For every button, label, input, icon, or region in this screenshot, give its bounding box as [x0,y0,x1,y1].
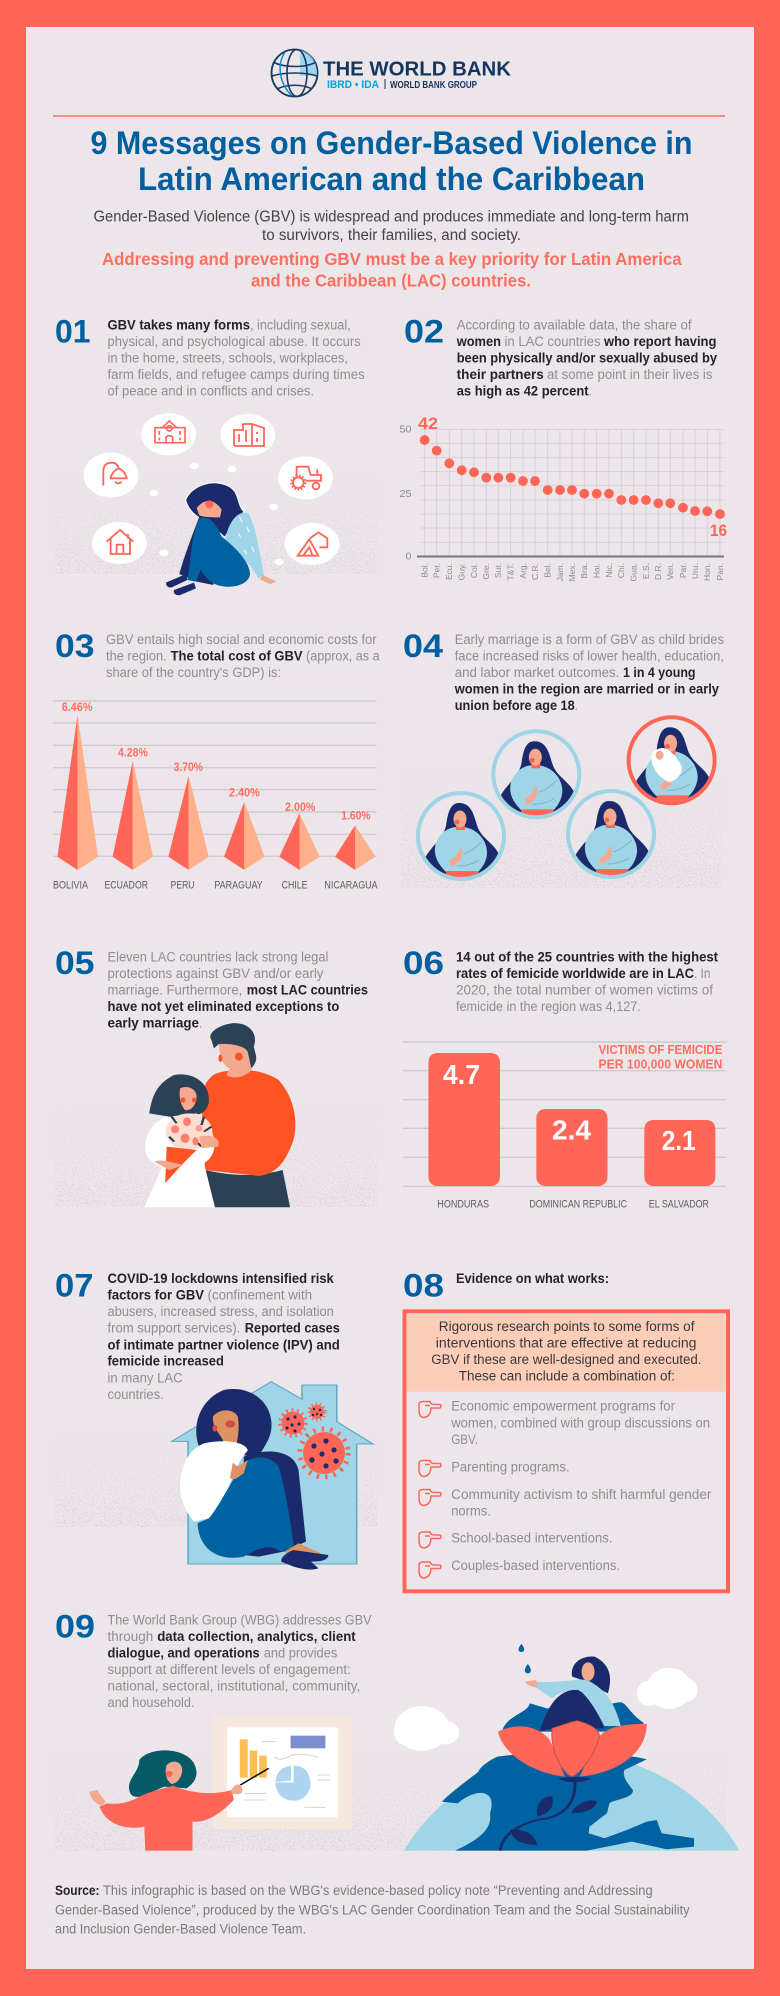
bar: Dominican Republic: DOMINICAN REPUBLIC [529,1198,627,1210]
message 05 text: have not yet eliminated exceptions to [108,999,339,1014]
logo: The World Bank: IBRD • IDA [327,79,379,91]
list item: community activism: norms. [451,1504,491,1519]
message 09 [55,1609,739,1851]
title: Latin American and the Caribbean [138,161,645,197]
message 07 text: COVID-19 lockdowns intensified risk [108,1271,334,1286]
dot chart: women reporting partner abuse by country: Mex. [567,563,577,581]
box header: Rigorous research points to some forms of [439,1319,695,1334]
message 07 text: of intimate partner violence (IPV) and [108,1337,340,1352]
message 09 text: and provides [264,1645,338,1660]
number 02: 02 [404,314,444,350]
chart caption: VICTIMS OF FEMICIDE [598,1042,723,1057]
message 04 text: face increased risks of lower health, education, [455,649,724,664]
dot chart: women reporting partner abuse by country: Par. [678,563,688,578]
bar: Bolivia: 6.46% [62,702,92,714]
message 08 heading: Evidence on what works: [456,1271,609,1286]
message 03 text: share of the country's GDP) is: [106,665,281,680]
message 03 text: GBV entails high social and economic costs for [106,632,377,647]
bar: Ecuador [104,747,153,892]
message 06 text: . In [694,966,710,981]
figure: sitting woman [166,483,277,595]
message 07 text: from support services). [108,1321,240,1336]
bar: Ecuador: ECUADOR [104,880,148,892]
intro text: Gender-Based Violence (GBV) is widespread and produces immediate and long-term harm [94,209,689,226]
spike chart: cost of GBV as share of GDP [53,701,378,892]
message 09 text: support at different levels of engagement: [108,1662,351,1677]
figure: woman [180,1389,328,1570]
bar: Bolivia: BOLIVIA [53,880,89,892]
dot chart: women reporting partner abuse by country: Ecu. [444,563,454,580]
list item: community activism [419,1487,712,1519]
list item: community activism: Community activism to shift harmful gender [451,1487,712,1502]
intro text [94,209,689,244]
medallion: young woman 3 [568,791,654,878]
message 01 [55,314,377,595]
message 09 text: The World Bank Group (WBG) addresses GBV [108,1612,372,1627]
number 04: 04 [403,628,443,664]
message 09 text: through [108,1629,153,1644]
dot chart: women reporting partner abuse by country: Col. [469,563,479,578]
source note: Source: [55,1883,100,1898]
message 09 text: national, sectoral, institutional, community, [108,1678,360,1693]
number 08: 08 [403,1268,444,1304]
message 02 text: who report having [603,334,716,349]
message 04 [400,628,724,888]
message 05 text: . [199,1015,202,1030]
figure: woman on flower [525,1656,621,1732]
message 01 text: in the home, streets, schools, workplaces, [108,350,348,365]
message 01 text: , including sexual, [250,317,351,332]
message 05 text: protections against GBV and/or early [108,966,324,981]
bar: Honduras: HONDURAS [437,1198,489,1210]
illustration: woman presenting data [55,1716,726,1851]
message 05 text: early marriage [108,1015,199,1030]
bar: El Salvador [644,1120,715,1210]
message 09 text: dialogue, and operations [108,1645,260,1660]
message 06 [403,945,726,1210]
illustration: young women in medallions [400,717,721,888]
dot chart: women reporting partner abuse by country: Sur. [493,563,503,578]
list item: economic empowerment: GBV. [451,1432,478,1447]
box header: interventions that are effective at reducing [436,1336,696,1351]
dot chart: women reporting partner abuse by country: Bel. [542,563,552,578]
bar: Paraguay: PARAGUAY [214,880,263,892]
message 05 text: Eleven LAC countries lack strong legal [108,949,328,964]
dot chart: women reporting partner abuse by country: 25 [400,488,412,500]
chart caption: PER 100,000 WOMEN [598,1057,722,1072]
water drops [519,1644,531,1673]
number 07: 07 [55,1268,94,1304]
message 07 text: femicide increased [108,1354,224,1369]
priority statement: and the Caribbean (LAC) countries. [251,271,531,291]
list item: economic empowerment: Economic empowerment programs for [451,1399,675,1414]
cloud left [394,1706,459,1751]
dot chart: women reporting partner abuse by country: Per. [432,563,442,578]
message 07 text: abusers, increased stress, and isolation [108,1304,334,1319]
bar: Honduras: 4.7 [443,1059,480,1090]
message 03 text: The total cost of GBV [171,649,302,664]
list item: parenting programs: Parenting programs. [451,1459,570,1474]
bar: El Salvador: 2.1 [662,1125,696,1156]
list item: couples-based interventions: Couples-based interventions. [451,1558,620,1573]
message 04 text: . [575,698,578,713]
globe [404,1752,739,1851]
logo: The World Bank [272,50,512,96]
icon: small virus [309,1404,325,1420]
message 02 text: in LAC countries [504,334,601,349]
illustration: child bride and adult man [55,1023,377,1207]
dot chart: women reporting partner abuse by country: Gre. [481,563,491,580]
bar: Dominican Republic: 2.4 [552,1114,591,1145]
bar: Peru: PERU [171,880,195,892]
bar: Dominican Republic [529,1109,627,1210]
source note [55,1883,690,1937]
message 05 text: most LAC countries [247,982,368,997]
message 04 text: women in the region are married or in early [454,682,719,697]
chart caption [598,1042,723,1072]
message 02 text: been physically and/or sexually abused by [457,350,717,365]
message 07 text: in many LAC [108,1370,183,1385]
cloud right [637,1668,697,1709]
bar: Nicaragua: 1.60% [341,811,371,823]
box header [407,1314,726,1392]
number 05: 05 [55,945,94,981]
dot chart: women reporting partner abuse by country: Pan. [715,563,725,580]
dot chart: women reporting partner abuse by country: Nic. [604,563,614,578]
list item: parenting programs [419,1459,570,1476]
box header: These can include a combination of: [459,1369,675,1384]
message 05 text: marriage. Furthermore, [108,982,242,997]
message 02 text: as high as 42 percent [457,383,589,398]
bar: Paraguay [214,787,265,892]
number 03: 03 [55,628,94,664]
medallion: young woman 1 [493,731,579,818]
message 02 text: According to available data, the share of [457,317,692,332]
number 06: 06 [403,945,444,981]
dot chart: women reporting partner abuse by country: 16 [710,521,727,540]
evidence box [404,1311,728,1591]
message 06 text: 2020, the total number of women victims of [456,982,713,997]
source note: Gender-Based Violence”, produced by the WBG's LAC Gender Coordination Team and the Social Sustainability [55,1902,690,1917]
message 06 text [456,949,718,1014]
message 09 text: and household. [108,1695,194,1710]
presentation board [212,1716,352,1829]
message 02 text: their partners [457,367,544,382]
dot chart: women reporting partner abuse by country: Jam. [555,563,565,581]
flower petals [498,1721,647,1777]
message 01 text [108,317,365,398]
message 01 text: physical, and psychological abuse. It occurs [108,334,361,349]
bar: Nicaragua [324,811,378,892]
message 02 [400,314,727,581]
dot chart: women reporting partner abuse by country: Hai. [592,563,602,578]
logo: The World Bank: THE WORLD BANK [323,58,512,80]
figure: girl with bouquet [144,1074,219,1207]
message 04 text: Early marriage is a form of GBV as child brides [455,632,724,647]
message 08 [403,1268,728,1591]
message 07 text: factors for GBV [108,1288,204,1303]
message 02 text [456,317,717,398]
number 01: 01 [55,314,90,350]
icon: office buildings [234,424,264,446]
dot chart: women reporting partner abuse by country: Arg. [518,563,528,579]
message 06 text: rates of femicide worldwide are in LAC [456,966,694,981]
bar: Paraguay: 2.40% [229,787,260,799]
bar: Chile: CHILE [282,880,308,892]
message 03 text: the region. [106,649,167,664]
source note: and Inclusion Gender-Based Violence Team. [55,1922,306,1937]
message 07 text: Reported cases [245,1321,340,1336]
priority statement [102,249,682,291]
message 01 text: GBV takes many forms [108,317,250,332]
title: 9 Messages on Gender-Based Violence in [90,125,692,161]
title [90,125,692,197]
dot chart: women reporting partner abuse by country: Uru. [690,563,700,579]
message 07 text: countries. [108,1387,164,1402]
icon: street lamp [103,463,127,486]
message 07 text: (confinement with [208,1288,312,1303]
list item: economic empowerment [419,1399,710,1447]
message 06 text: 14 out of the 25 countries with the highest [456,949,718,964]
bar: Nicaragua: NICARAGUA [324,880,378,892]
dot chart: women reporting partner abuse by country: Guy. [456,563,466,580]
message 04 text: 1 in 4 young [623,665,696,680]
message 02 text: at some point in their lives is [547,367,713,382]
bar: Honduras [428,1053,500,1210]
dot chart: women reporting partner abuse by country: T&T. [506,563,516,580]
bar: Bolivia [53,702,98,892]
bar: Peru [168,762,209,892]
icon: house [172,1382,373,1564]
dot chart: women reporting partner abuse by country: 42 [418,414,438,433]
icon: home [107,530,133,554]
bar: El Salvador: EL SALVADOR [649,1198,709,1210]
message 04 text: and labor market outcomes. [455,665,619,680]
message 05 [55,945,377,1207]
message 04 text [454,632,724,713]
message 07 [55,1268,377,1570]
bar: Peru: 3.70% [174,762,203,774]
message 02 text: women [456,334,501,349]
medallion: young mother with baby [629,717,715,804]
message 09 text [108,1612,372,1710]
bar: Chile: 2.00% [285,802,315,814]
message 01 text: farm fields, and refugee camps during times [108,367,365,382]
dot chart: women reporting partner abuse by country: Bol. [420,563,430,578]
logo: The World Bank: WORLD BANK GROUP [390,80,477,91]
message 03 text: (approx, as a [306,649,380,664]
figure: presenter [90,1750,242,1851]
icon: tractor [291,467,321,490]
message 04 text: union before age 18 [455,698,575,713]
message 09 text: data collection, analytics, client [157,1629,356,1644]
list item: couples-based interventions [419,1558,620,1578]
bar: Ecuador: 4.28% [118,747,148,759]
message 03 text [106,632,380,680]
list item: school-based interventions: School-based interventions. [451,1531,612,1546]
message 02 text: . [589,383,592,398]
flower and stem [500,1702,644,1851]
illustration: woman surrounded by places [55,413,377,595]
message 06 text: femicide in the region was 4,127. [456,999,641,1014]
dot chart: women reporting partner abuse by country: Hon. [702,563,712,581]
bar chart: victims of femicide per 100,000 women [403,1042,726,1210]
dot chart: women reporting partner abuse by country: 50 [400,424,412,436]
intro text: to survivors, their families, and society. [262,227,521,244]
list item: economic empowerment: women, combined with group discussions on [450,1415,710,1430]
icon: school [155,421,185,443]
dot chart: women reporting partner abuse by country: D.R. [653,563,663,580]
medallion: young woman 2 [418,793,504,880]
illustration: woman sitting in a flower on the globe [394,1644,739,1851]
dot chart: women reporting partner abuse by country: Gua. [628,563,638,581]
message 05 text [108,949,368,1030]
source note: This infographic is based on the WBG's evidence-based policy note “Preventing and Addressing [103,1883,653,1898]
dot chart: women reporting partner abuse by country: Bra. [579,563,589,579]
box header: GBV if these are well-designed and executed. [431,1352,702,1367]
bar: Chile [279,802,320,892]
illustration: woman isolated in house with viruses [55,1382,377,1570]
message 03 [53,628,380,892]
priority statement: Addressing and preventing GBV must be a key priority for Latin America [102,249,682,269]
message 01 text: of peace and in conflicts and crises. [108,383,314,398]
icon: large virus [300,1429,348,1477]
icon: refugee tents [298,532,327,556]
number 09: 09 [55,1609,95,1645]
icon: medium virus [280,1410,306,1436]
figure: man [201,1023,295,1207]
message 07 text [108,1271,340,1402]
dot chart: women reporting partner abuse by country [400,414,727,581]
dot chart: women reporting partner abuse by country: 0 [406,551,412,563]
dot chart: women reporting partner abuse by country: C.R. [530,563,540,580]
dot chart: women reporting partner abuse by country: Chi. [616,563,626,578]
dot chart: women reporting partner abuse by country: Ven. [665,563,675,580]
dot chart: women reporting partner abuse by country: E.S. [641,563,651,579]
